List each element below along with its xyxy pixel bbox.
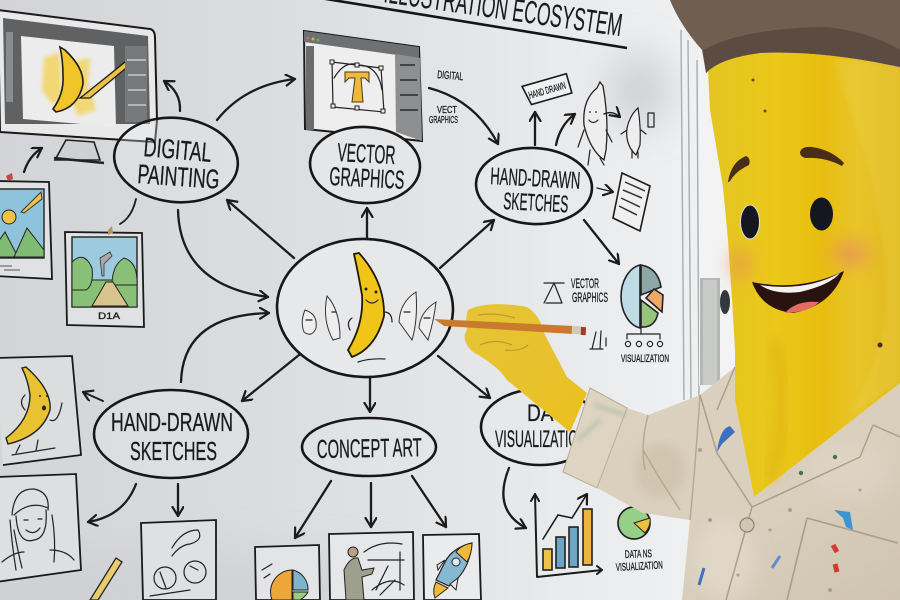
node: hand-drawn sketches top right: HAND-DRAWN — [490, 163, 581, 195]
label: data ns visualization — [616, 548, 663, 574]
node: vector graphics — [308, 124, 422, 206]
icon: pie chart — [621, 265, 663, 347]
text: GRAPHICS — [572, 289, 608, 305]
board frame and bracket — [681, 30, 739, 600]
icon: pencil bottom left — [90, 558, 122, 600]
node: hand-drawn sketches left: SKETCHES — [130, 436, 217, 466]
icon: hand drawn sign — [522, 74, 572, 106]
eyebrows — [728, 147, 844, 182]
node: concept art: CONCEPT ART — [317, 432, 422, 464]
icon: document — [613, 173, 650, 231]
icon: concept pie frame — [255, 545, 320, 600]
cheeks — [731, 241, 871, 280]
node: data visualization — [481, 389, 599, 465]
node: vector graphics: VECTOR — [337, 137, 396, 170]
bar chart — [531, 494, 602, 577]
icon: sketch banana characters — [578, 82, 654, 165]
icon: sketches frame — [141, 520, 216, 600]
node: data visualization: DATA — [527, 400, 575, 427]
painter hat — [670, 0, 900, 73]
node: hand-drawn sketches left: HAND-DRAWN — [111, 407, 233, 437]
mouth — [752, 271, 844, 313]
icon: picture frame landscape 2 — [65, 226, 144, 327]
icon: picture frame landscape 2: D1A — [98, 311, 120, 321]
painter glove hand — [465, 304, 587, 432]
label: vector graphics note — [429, 105, 458, 126]
label: vector graphics note: VECT — [437, 105, 457, 116]
label: vector graphics — [571, 275, 608, 305]
label: visualization: VISUALIZATION — [621, 353, 669, 365]
node: central banana — [275, 236, 455, 380]
painter coat — [563, 367, 900, 600]
icon: rocket frame — [423, 534, 481, 600]
label: digital: DIGITAL — [437, 69, 464, 83]
node: digital painting: DIGITAL — [142, 132, 213, 168]
icon: portrait sketch frame — [0, 474, 81, 582]
pencil — [434, 319, 586, 335]
node: hand-drawn sketches top right: SKETCHES — [503, 188, 569, 218]
icon: small tool sketch — [590, 331, 606, 349]
node: digital painting — [110, 112, 242, 208]
node: vector graphics: GRAPHICS — [329, 161, 405, 195]
arrows — [24, 79, 619, 538]
icon: vector graphics window — [304, 31, 422, 141]
icon: concept artist frame — [329, 532, 414, 600]
label: vector graphics note: GRAPHICS — [429, 115, 458, 126]
eyes — [740, 198, 833, 239]
icon: hand drawn sign: HAND DRAWN — [528, 81, 567, 102]
small pie chart — [618, 507, 650, 539]
node: hand-drawn sketches left — [94, 390, 248, 478]
icon: vector tool — [544, 283, 564, 303]
icon: picture frame landscape 1 — [0, 173, 52, 279]
title — [320, 0, 627, 48]
label: vector graphics: VECTOR — [571, 275, 599, 291]
label: data ns visualization: DATA NS — [625, 548, 652, 561]
banana mascot head — [708, 50, 900, 497]
node: hand-drawn sketches top right — [474, 145, 594, 227]
icon: monitor with banana — [0, 10, 157, 163]
label: data ns visualization: VISUALIZATION — [616, 560, 663, 574]
node: concept art — [302, 418, 436, 476]
node: digital painting: PAINTING — [137, 159, 220, 195]
icon: hand-drawn banana frame — [0, 356, 81, 465]
node: data visualization: VISUALIZATION — [495, 426, 587, 453]
